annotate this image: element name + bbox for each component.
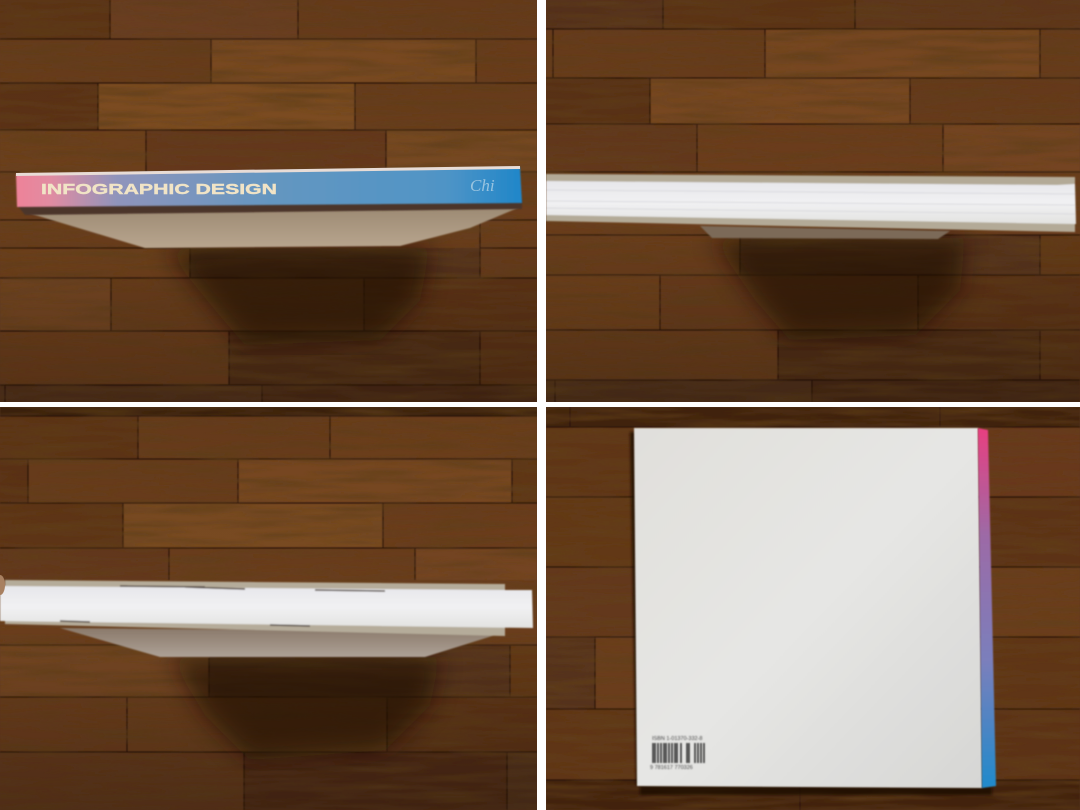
panel: top-right photo, book fore edge on wood floor [546, 0, 1080, 402]
spine signature: Chi [470, 176, 495, 195]
spine title: INFOGRAPHIC DESIGN [41, 181, 277, 198]
book: back cover [634, 428, 982, 788]
ISBN text: ISBN 1-01370-332-8 [652, 736, 702, 742]
panel: top-left photo, book spine with title on wood floor [0, 0, 537, 402]
finger at left edge [0, 575, 5, 595]
barcode digits: 9 781617 770326 [650, 765, 693, 771]
book: fore edge pages [546, 174, 1076, 239]
book: spine and lower cover [16, 166, 522, 248]
book: spine strip [978, 428, 996, 788]
shadow under book [165, 248, 430, 345]
panel: bottom-left photo, book bottom edge on wood floor [0, 407, 537, 810]
shadow under book [630, 432, 992, 795]
panel: bottom-right photo, back cover with barcode [546, 407, 1080, 810]
book: bottom edge pages [0, 580, 533, 657]
barcode [650, 736, 704, 771]
shadow under book [712, 238, 965, 340]
shadow under book [170, 657, 440, 760]
